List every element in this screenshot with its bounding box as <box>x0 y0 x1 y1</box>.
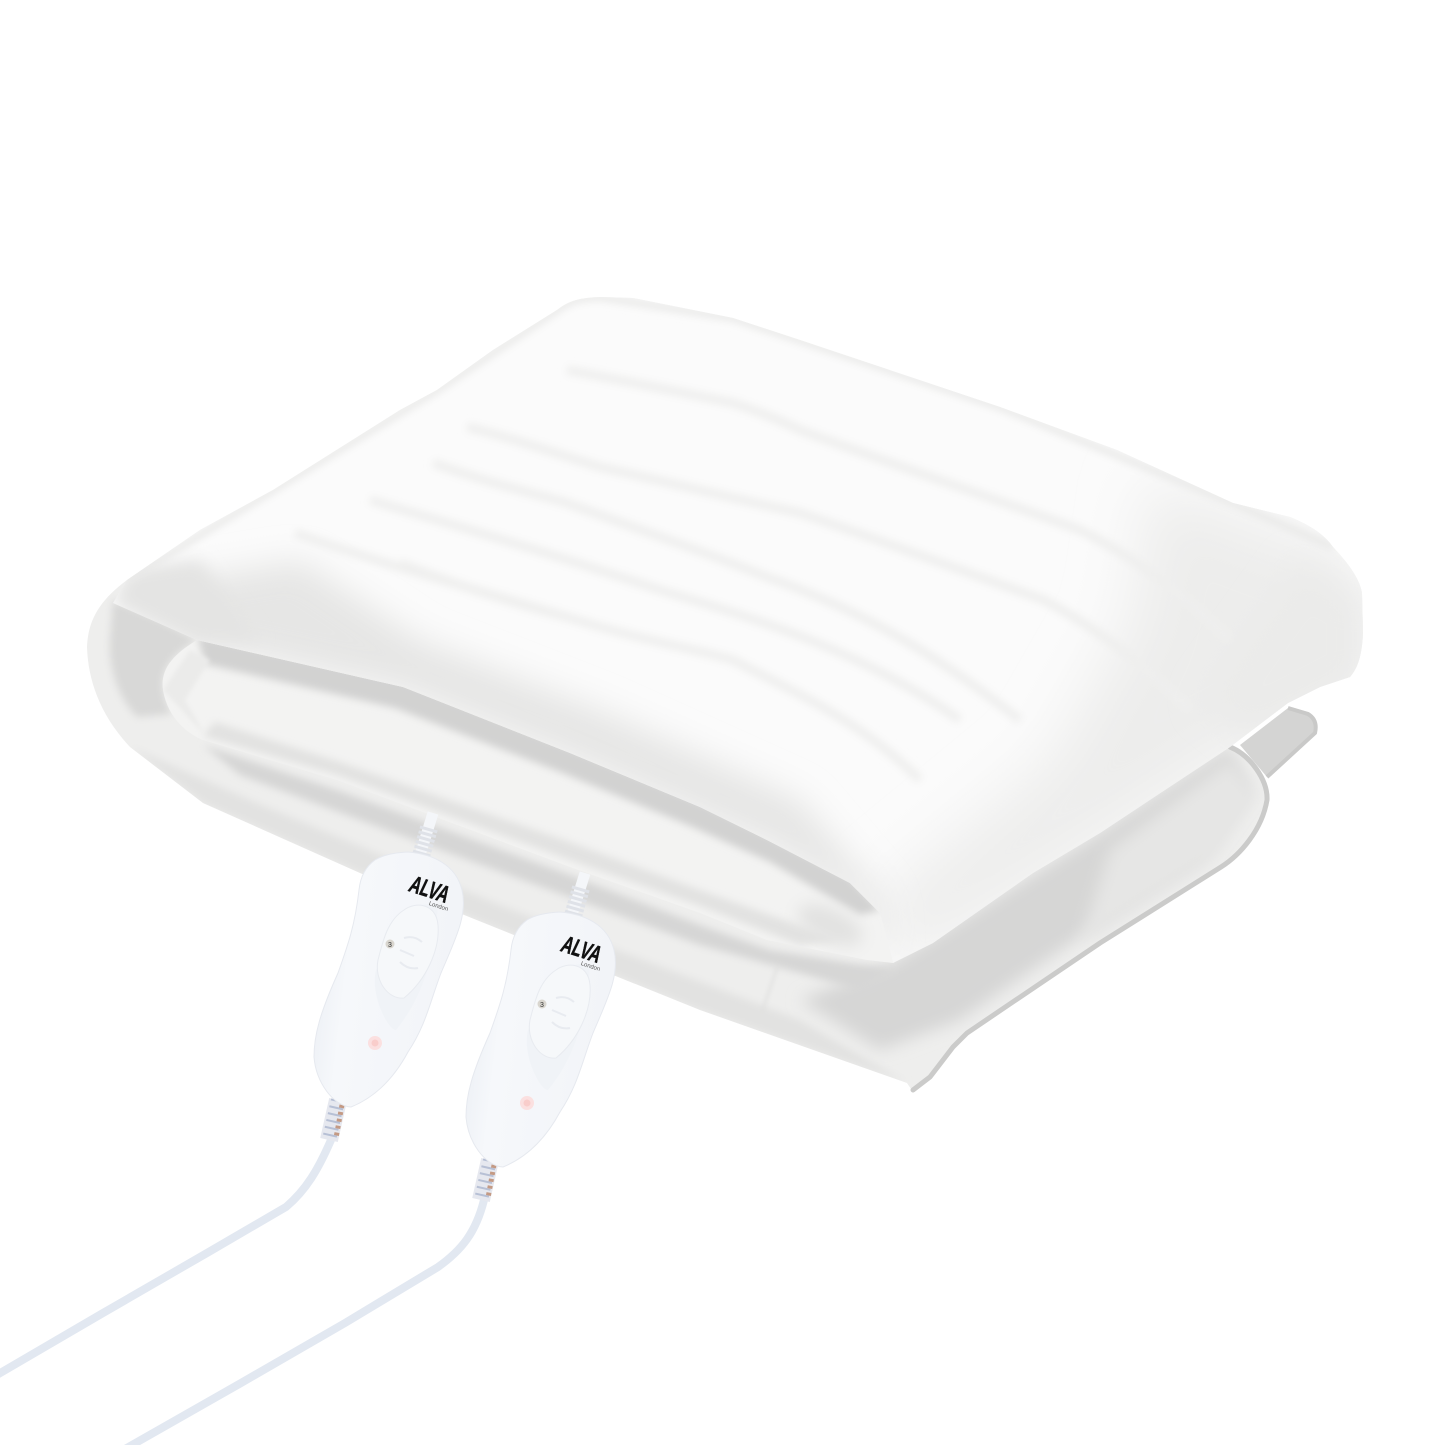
bottom strain relief <box>481 1160 494 1200</box>
seam on lower layer <box>762 965 778 1012</box>
shadow under roll <box>203 745 893 990</box>
setting number <box>386 940 394 949</box>
back layer tab <box>1240 708 1316 777</box>
lower blanket layer and left fold <box>87 580 1270 1092</box>
slider recess <box>375 904 438 1030</box>
power LED <box>368 1036 382 1050</box>
button grip lines <box>400 937 422 968</box>
handset body <box>466 912 616 1167</box>
logo subtext: London <box>580 961 601 973</box>
controller 1 <box>314 813 464 1140</box>
slider button <box>377 905 438 998</box>
slider recess <box>527 964 590 1090</box>
bottom strain relief <box>329 1100 342 1140</box>
button grip lines <box>552 997 574 1028</box>
cord 2 <box>125 1200 484 1445</box>
top edge shading <box>158 297 1324 559</box>
setting number <box>538 1000 546 1009</box>
underside shading <box>209 559 876 907</box>
setting number: 3 <box>388 942 392 949</box>
blanket <box>87 297 1365 1092</box>
power LED <box>520 1096 534 1110</box>
logo subtext: London <box>428 901 449 913</box>
top blanket layer <box>113 297 1365 970</box>
inner roll <box>163 635 893 963</box>
logo: ALVA <box>406 871 453 909</box>
lower left edge haze <box>158 764 870 1066</box>
ribs <box>299 369 1108 778</box>
bound hem stitching <box>913 747 1267 1090</box>
top cable and strain relief <box>421 813 433 856</box>
top cable and strain relief <box>573 873 585 916</box>
left hollow <box>110 600 197 717</box>
grey underside shadow <box>800 747 1250 1050</box>
logo: ALVA <box>558 931 605 969</box>
setting number: 3 <box>540 1002 544 1009</box>
cord 1 <box>0 1140 331 1376</box>
slider button <box>529 965 590 1058</box>
product illustration: folded heated blanket with two controllers <box>0 297 1363 1445</box>
soft shading right and front <box>902 504 1336 938</box>
controller 2 <box>466 873 616 1200</box>
handset body <box>314 852 464 1107</box>
